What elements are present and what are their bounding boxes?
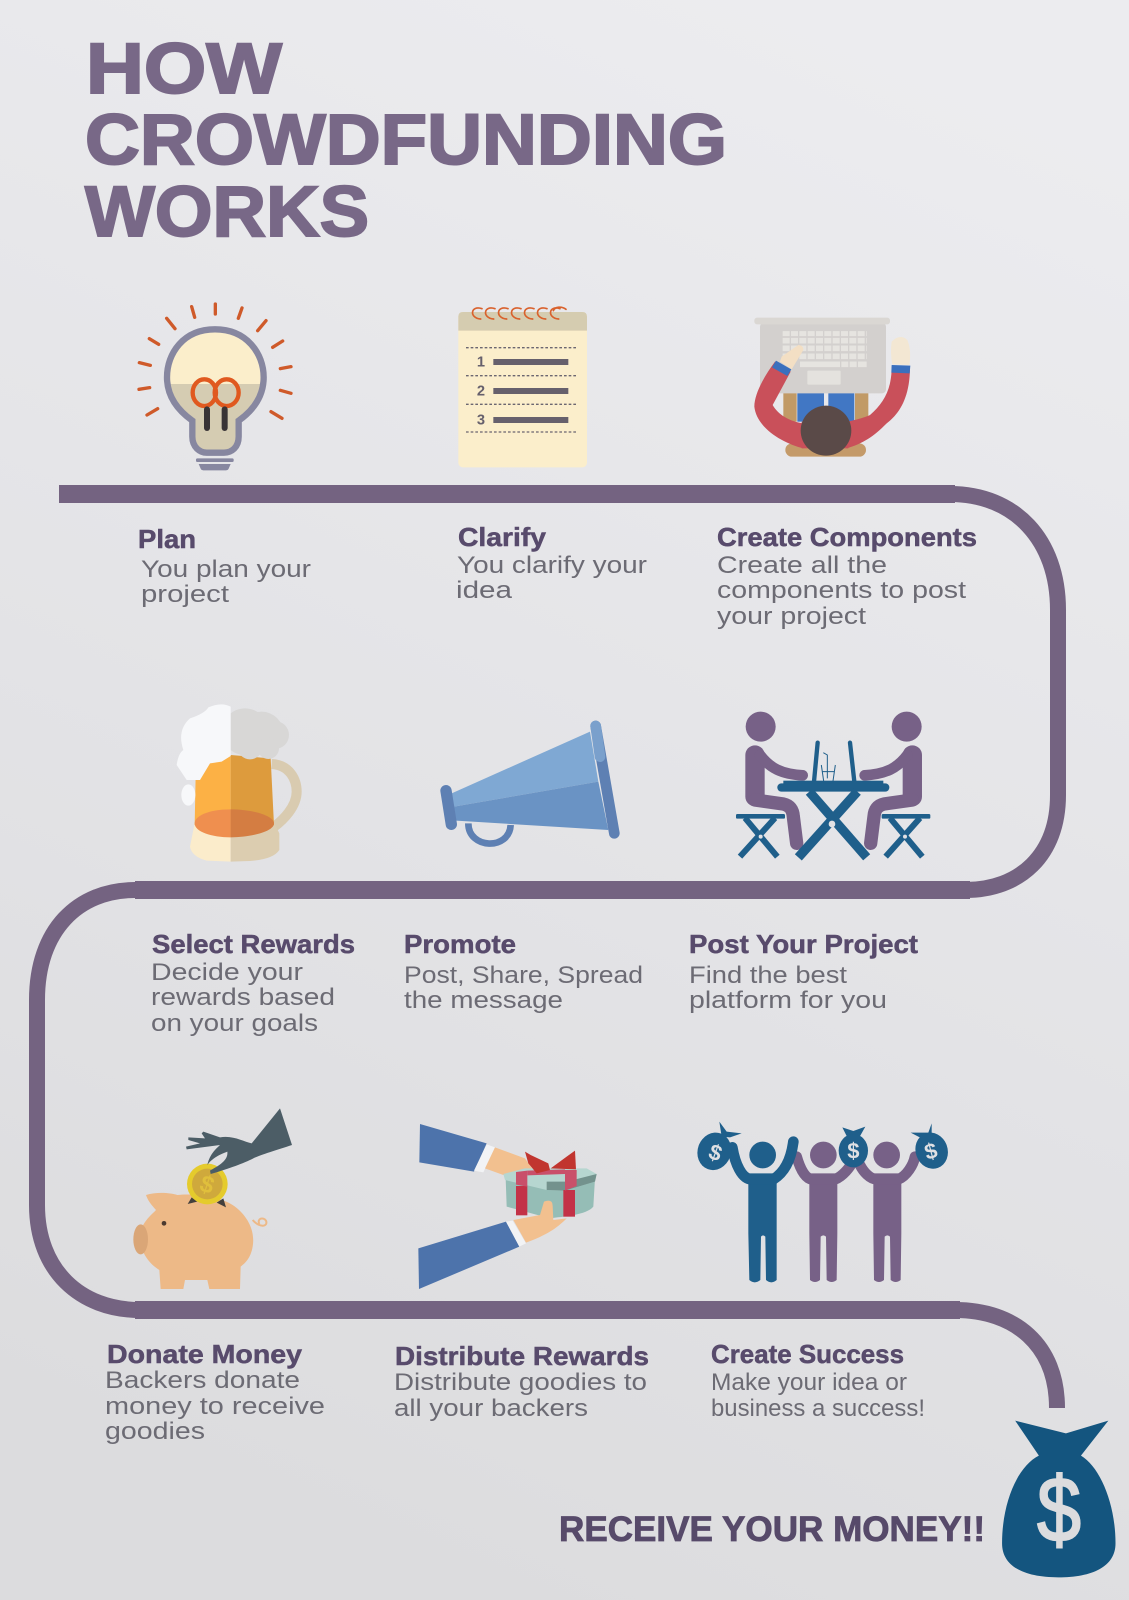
icon: large money bag <box>1002 1421 1116 1577</box>
heading: Distribute Rewards <box>395 1341 649 1371</box>
icon: two people at a table with laptops <box>736 712 930 857</box>
description: Decide your <box>151 959 303 986</box>
panel: Plan <box>138 304 311 608</box>
description: Create all the <box>717 552 887 579</box>
icon: hands exchanging a gift <box>418 1124 597 1289</box>
description: Backers donate <box>105 1367 300 1394</box>
description: your project <box>717 603 866 630</box>
title: HOW <box>86 30 282 109</box>
icon: light bulb <box>139 304 291 470</box>
description <box>711 1369 925 1422</box>
panel: Clarify <box>456 307 647 604</box>
description: Find the best <box>689 962 847 989</box>
winding path connecting the steps <box>37 494 1058 1408</box>
icon: beer mug <box>177 704 297 862</box>
panel: Create Components <box>717 318 977 630</box>
description: idea <box>456 577 512 604</box>
panel: Create Success <box>692 1122 953 1422</box>
panel: Donate Money <box>105 1108 325 1445</box>
description: on your goals <box>151 1010 318 1037</box>
heading: Promote <box>404 929 516 959</box>
description: components to post <box>717 577 966 604</box>
description: money to receive <box>105 1393 325 1420</box>
heading: Donate Money <box>107 1339 303 1369</box>
icon: three people holding money bags: $ <box>922 1137 940 1165</box>
description: business a success! <box>711 1395 925 1422</box>
panel: Promote <box>404 726 643 1014</box>
description: rewards based <box>151 984 335 1011</box>
description <box>141 556 311 608</box>
icon: piggy bank with coin and hand <box>133 1108 292 1289</box>
description: all your backers <box>394 1395 588 1422</box>
description <box>151 959 335 1037</box>
heading: Create Success <box>711 1339 904 1369</box>
title: CROWDFUNDING <box>85 101 727 180</box>
description: project <box>141 581 229 608</box>
icon: piggy bank with coin and hand: $ <box>196 1170 217 1200</box>
description <box>404 962 643 1014</box>
heading: Select Rewards <box>152 929 355 959</box>
icon: three people holding money bags: $ <box>847 1139 859 1164</box>
panel: Select Rewards <box>151 704 355 1037</box>
icon: three people holding money bags <box>692 1122 953 1282</box>
icon: three people holding money bags: $ <box>705 1139 725 1166</box>
description: Post, Share, Spread <box>404 962 643 989</box>
icon: large money bag: $ <box>1037 1458 1081 1561</box>
callout: receive your money: RECEIVE YOUR MONEY!! <box>559 1510 985 1549</box>
title: WORKS <box>85 173 369 252</box>
icon: person at laptop from above <box>754 318 910 457</box>
icon: notepad checklist: 2 <box>477 383 485 399</box>
panel: Distribute Rewards <box>394 1124 649 1422</box>
description <box>394 1369 647 1422</box>
description: You clarify your <box>457 552 647 579</box>
description: You plan your <box>141 556 311 583</box>
heading: Create Components <box>717 522 977 552</box>
heading: Plan <box>138 524 196 554</box>
icon: notepad checklist <box>458 307 587 467</box>
description: Distribute goodies to <box>394 1369 647 1396</box>
heading: Post Your Project <box>689 929 918 959</box>
title <box>85 30 727 252</box>
description <box>717 552 966 630</box>
description: goodies <box>105 1418 205 1445</box>
icon: megaphone <box>446 726 614 844</box>
description <box>456 552 647 604</box>
icon: notepad checklist: 1 <box>477 354 485 370</box>
description <box>689 962 887 1014</box>
description <box>105 1367 325 1445</box>
description: platform for you <box>689 987 887 1014</box>
description: the message <box>404 987 563 1014</box>
heading: Clarify <box>458 522 547 552</box>
description: Make your idea or <box>711 1369 907 1396</box>
icon: notepad checklist: 3 <box>477 412 485 428</box>
panel: Post Your Project <box>689 712 930 1014</box>
